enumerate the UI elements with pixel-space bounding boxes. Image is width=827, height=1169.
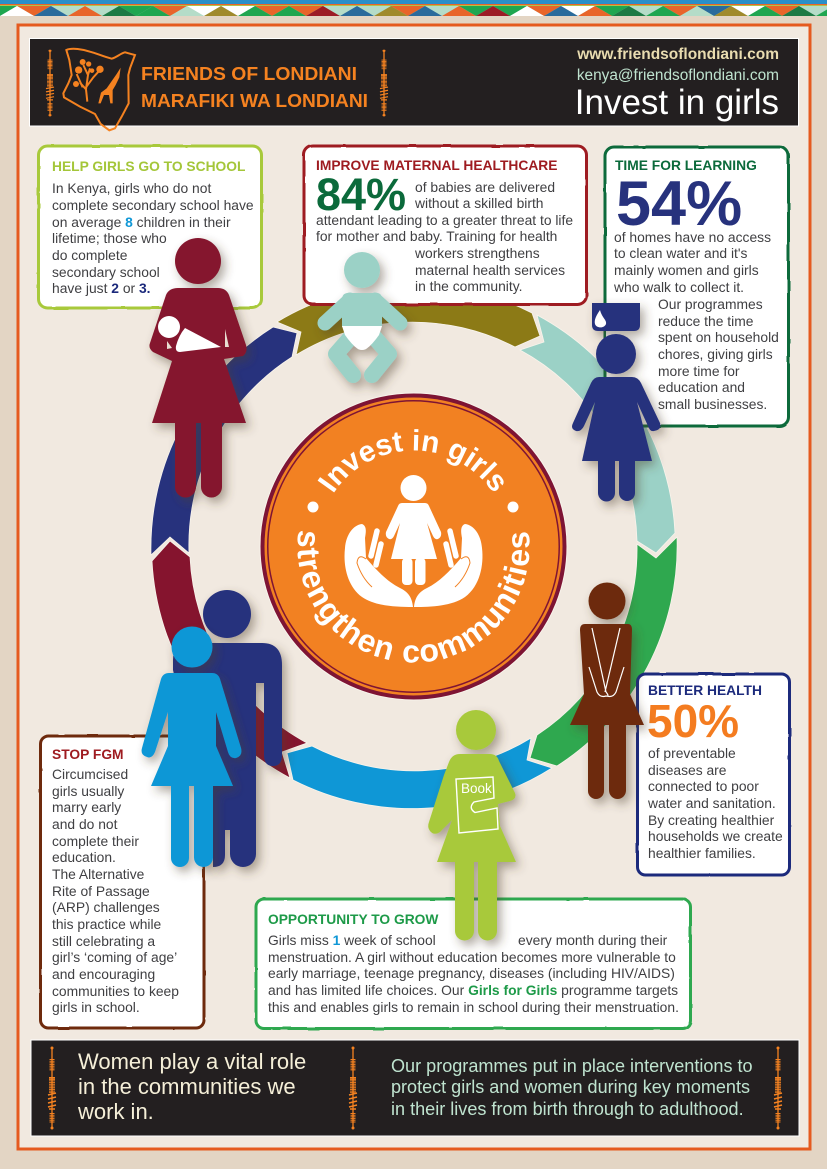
- heading: STOP FGM: [52, 747, 124, 762]
- baby bundle: [158, 316, 229, 352]
- body text: without a skilled birth: [414, 195, 544, 211]
- arrow: maroon: [152, 541, 307, 778]
- statistic 54%: 54%: [616, 169, 742, 239]
- body text: reduce the time: [658, 313, 754, 329]
- body text: By creating healthier: [648, 812, 775, 828]
- figure: girl with book: [428, 710, 516, 940]
- body text: spent on household: [658, 329, 779, 345]
- icon: Kenya map with tree and giraffe: [63, 49, 135, 130]
- body text: on average 8 children in their: [52, 214, 231, 230]
- body text: and has limited life choices. Our Girls for Girls programme targets: [268, 982, 678, 998]
- book: [456, 777, 498, 833]
- footer right text: [391, 1056, 753, 1119]
- body text: for mother and baby. Training for health: [316, 228, 557, 244]
- arrow: olive: [277, 284, 540, 355]
- body text: attendant leading to a greater threat to life: [316, 212, 573, 228]
- body text: and do not: [52, 816, 118, 832]
- arrow: navy: [151, 327, 297, 555]
- figure: mother with baby: [149, 238, 247, 498]
- body text: water and sanitation.: [647, 795, 776, 811]
- figure: baby: [325, 252, 400, 375]
- footer bar: [31, 1040, 799, 1136]
- organisation name: [141, 64, 368, 111]
- arrow: green: [530, 537, 677, 766]
- footer right text: Our programmes put in place interventions to: [391, 1056, 753, 1076]
- water container: [592, 303, 640, 331]
- body text: complete their: [52, 833, 139, 849]
- body text: still celebrating a: [52, 933, 155, 949]
- body text: Girls miss 1 week of school: [268, 932, 436, 948]
- body text: this practice while: [52, 916, 162, 932]
- body text: education and: [658, 379, 745, 395]
- body text: marry early: [52, 799, 121, 815]
- body text: menstruation. A girl without education becomes more vulnerable to: [268, 949, 676, 965]
- footer ornament 3: [774, 1047, 782, 1129]
- header ornament left: [46, 50, 54, 116]
- body text: mainly women and girls: [614, 262, 759, 278]
- body text: girl’s ‘coming of age’: [52, 949, 177, 965]
- book: Book: [461, 781, 492, 796]
- medallion dots: [308, 502, 518, 512]
- body text: more time for: [658, 363, 740, 379]
- header title: Invest in girls: [575, 83, 779, 122]
- panel: stop FGM: [40, 736, 204, 1028]
- figure: woman carrying water: [572, 303, 660, 502]
- heading: HELP GIRLS GO TO SCHOOL: [52, 159, 245, 174]
- figure: man: [173, 590, 282, 867]
- footer left text: work in.: [77, 1099, 154, 1124]
- body text: in the community.: [415, 278, 522, 294]
- body text: small businesses.: [658, 396, 767, 412]
- footer right text: in their lives from birth through to adulthood.: [391, 1099, 744, 1119]
- organisation name: FRIENDS OF LONDIANI: [141, 64, 357, 84]
- footer left text: Women play a vital role: [78, 1049, 306, 1074]
- body text: this and enables girls to remain in school during their menstruation.: [268, 999, 679, 1015]
- medallion top text: Invest in girls: [318, 429, 504, 492]
- panel: help girls go to school: [38, 146, 262, 308]
- ring of arrows: [151, 284, 677, 809]
- body text: healthier families.: [648, 845, 756, 861]
- body text: who walk to collect it.: [613, 279, 744, 295]
- body text: girls in school.: [52, 999, 140, 1015]
- footer right text: protect girls and women during key moments: [391, 1077, 750, 1097]
- footer left text: in the communities we: [78, 1074, 296, 1099]
- body text: workers strengthens: [414, 245, 540, 261]
- footer ornament 2: [349, 1047, 357, 1129]
- body text: In Kenya, girls who do not: [52, 180, 211, 196]
- body text: secondary school: [52, 264, 160, 280]
- footer ornament 1: [48, 1047, 56, 1129]
- body text: of preventable: [648, 745, 736, 761]
- body text: complete secondary school have: [52, 197, 254, 213]
- body text: Our programmes: [658, 296, 763, 312]
- body text: households we create: [648, 828, 783, 844]
- body text: every month during their: [518, 932, 668, 948]
- body text: of homes have no access: [614, 229, 771, 245]
- panel: time for learning: [605, 147, 788, 426]
- body text: connected to poor: [648, 778, 759, 794]
- body text: communities to keep: [52, 983, 179, 999]
- medallion bottom text: strengthen communities: [297, 530, 530, 663]
- website: www.friendsoflondiani.com: [576, 46, 779, 63]
- body text: and encouraging: [52, 966, 155, 982]
- heading: BETTER HEALTH: [648, 683, 762, 698]
- figure: woman in blue: [142, 626, 241, 867]
- heading: IMPROVE MATERNAL HEALTHCARE: [316, 158, 557, 173]
- body text: education.: [52, 849, 116, 865]
- central medallion: [260, 392, 568, 700]
- header ornament right: [380, 50, 388, 116]
- email: kenya@friendsoflondiani.com: [577, 67, 779, 84]
- body text: Rite of Passage: [52, 883, 150, 899]
- body text: of babies are delivered: [415, 179, 555, 195]
- heading: OPPORTUNITY TO GROW: [268, 912, 439, 927]
- body text: lifetime; those who: [52, 230, 167, 246]
- body text: Circumcised: [52, 766, 128, 782]
- heading: TIME FOR LEARNING: [615, 158, 757, 173]
- body text: to clean water and it's: [614, 245, 748, 261]
- organisation name: MARAFIKI WA LONDIANI: [141, 91, 368, 111]
- arm outlines: [589, 628, 624, 696]
- statistic 84%: 84%: [316, 169, 406, 220]
- top patterned border: [0, 0, 827, 16]
- body text: chores, giving girls: [658, 346, 773, 362]
- body text: early marriage, teenage pregnancy, diseases (including HIV/AIDS): [268, 965, 675, 981]
- panel: improve maternal healthcare: [304, 146, 586, 304]
- arrow: blue: [287, 738, 552, 809]
- header bar: [30, 38, 798, 130]
- body text: The Alternative: [52, 866, 145, 882]
- figure: woman with crossed arms: [570, 582, 644, 799]
- panel: opportunity to grow: [256, 899, 690, 1028]
- arrow: teal: [520, 315, 675, 553]
- statistic 50%: 50%: [647, 695, 739, 747]
- body text: maternal health services: [415, 262, 565, 278]
- body text: diseases are: [648, 762, 727, 778]
- body text: girls usually: [52, 783, 124, 799]
- panel: better health: [638, 674, 790, 875]
- body text: do complete: [52, 247, 128, 263]
- icon: girl in hands: [345, 475, 482, 607]
- body text: have just 2 or 3.: [52, 280, 151, 296]
- body text: (ARP) challenges: [52, 899, 160, 915]
